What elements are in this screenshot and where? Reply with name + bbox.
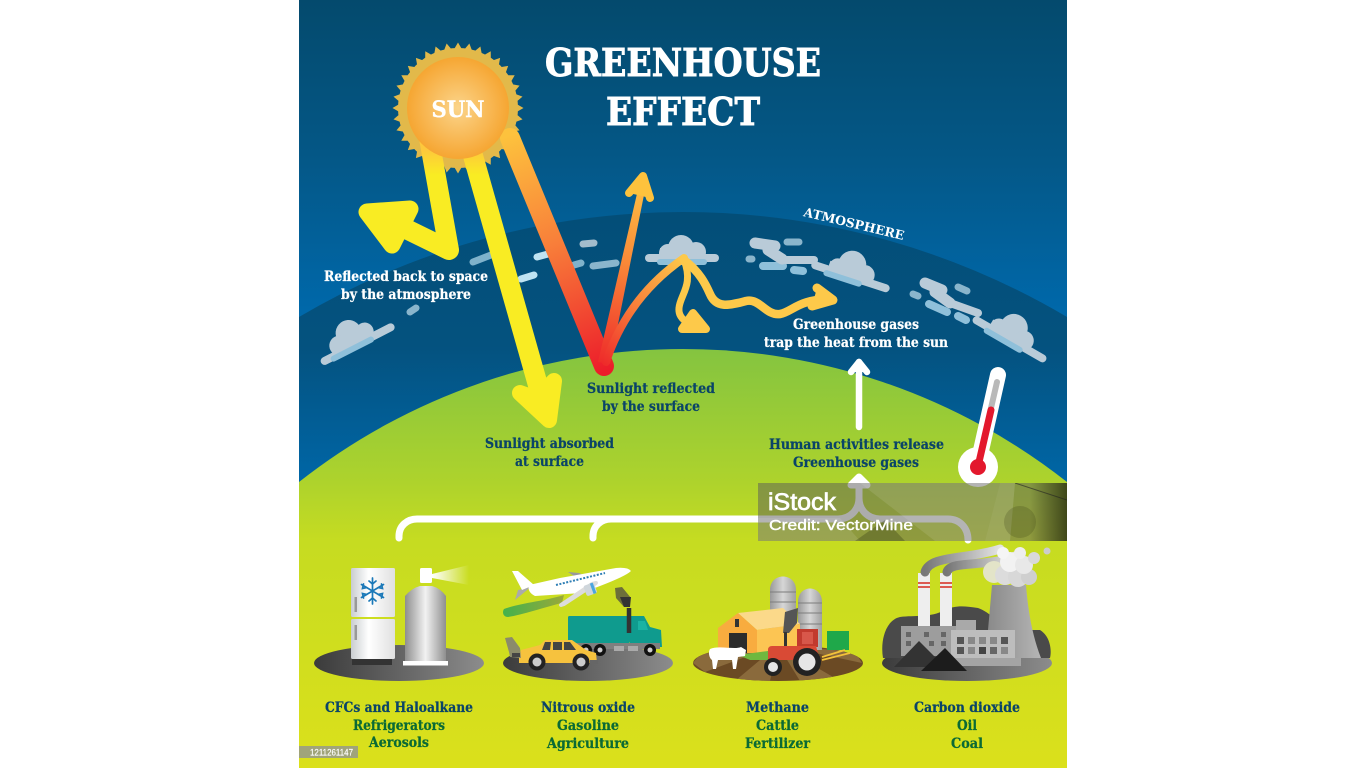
source: refrigerators and aerosols xyxy=(314,565,484,681)
spray can xyxy=(403,565,469,666)
text: sunlight reflected xyxy=(587,381,716,415)
labels: CFCs: Refrigerators xyxy=(353,718,445,734)
car xyxy=(505,637,598,670)
cloud: left xyxy=(312,303,392,364)
source: transport xyxy=(503,568,673,681)
labels: nitrous oxide: Agriculture xyxy=(546,736,629,752)
arrow: reflected by the atmosphere xyxy=(367,138,449,250)
text: sunlight absorbed xyxy=(485,436,615,470)
watermark banner xyxy=(758,483,1067,541)
text: reflected back to space: Reflected back to space xyxy=(324,269,488,285)
labels: nitrous oxide: Gasoline xyxy=(557,718,619,734)
text: reflected back to space xyxy=(324,269,488,303)
cloud: far right xyxy=(975,298,1055,362)
broken cloud: lower xyxy=(913,283,978,320)
coal piles xyxy=(894,641,967,671)
atmosphere dashes xyxy=(410,243,616,312)
labels: methane: Fertilizer xyxy=(745,736,811,752)
arrow: reflected to space xyxy=(598,176,650,364)
sun rays and halo xyxy=(392,42,524,174)
fridge xyxy=(351,568,395,665)
text: sunlight absorbed: at surface xyxy=(515,454,584,470)
labels: carbon dioxide xyxy=(914,700,1020,752)
text: human activities: Greenhouse gases xyxy=(793,455,919,471)
labels: nitrous oxide xyxy=(541,700,635,752)
broken cloud: upper xyxy=(749,242,814,271)
labels: methane xyxy=(745,700,811,752)
cloud: right of centre xyxy=(814,241,894,292)
dark background bushes xyxy=(882,606,1051,658)
sun label: SUN xyxy=(432,97,484,123)
text: greenhouse gases trap the heat xyxy=(764,317,948,351)
thermometer xyxy=(958,375,998,487)
title: EFFECT xyxy=(606,89,760,134)
labels: nitrous oxide: Nitrous oxide xyxy=(541,700,635,716)
arrow: incoming sunlight reflected by the surface xyxy=(510,138,604,366)
arrow: trapped heat xyxy=(684,260,833,314)
title: GREENHOUSE xyxy=(545,40,821,85)
cloud: centre xyxy=(649,235,715,262)
arrow: absorbed at surface xyxy=(468,138,554,420)
text: human activities: Human activities release xyxy=(769,437,944,453)
plane xyxy=(503,568,631,617)
cooling tower xyxy=(988,585,1041,658)
cow xyxy=(709,647,746,669)
text: human activities xyxy=(769,437,944,471)
silos xyxy=(770,576,822,650)
labels: carbon dioxide: Coal xyxy=(951,736,983,752)
image id tag: 1211261147 xyxy=(310,748,353,758)
background panel xyxy=(299,0,1067,768)
watermark brand: iStock xyxy=(768,489,837,516)
arrow: heat bounced back down xyxy=(679,260,706,329)
source: power plant xyxy=(882,547,1052,681)
text: greenhouse gases trap the heat: trap the heat from the sun xyxy=(764,335,948,351)
text: reflected back to space: by the atmosphere xyxy=(341,287,471,303)
text: sunlight reflected: by the surface xyxy=(602,399,700,415)
chimneys xyxy=(918,573,952,628)
labels: methane: Cattle xyxy=(756,718,799,734)
labels: carbon dioxide: Oil xyxy=(957,718,977,734)
text: sunlight reflected: Sunlight reflected xyxy=(587,381,716,397)
sun disc xyxy=(407,57,509,159)
labels: CFCs xyxy=(325,700,473,751)
infographic: greenhouse effect xyxy=(299,0,1067,768)
source: farm xyxy=(693,576,863,681)
arrow: reflected towards the gases xyxy=(606,258,684,362)
watermark credit: Credit: VectorMine xyxy=(769,517,913,534)
tractor xyxy=(764,608,850,676)
ground xyxy=(299,349,1067,768)
image id tag xyxy=(299,746,358,758)
smoke xyxy=(925,547,1050,587)
factory buildings xyxy=(901,620,1021,666)
atmosphere band xyxy=(299,212,1067,768)
labels: CFCs: Aerosols xyxy=(368,735,429,751)
text: greenhouse gases trap the heat: Greenhouse gases xyxy=(793,317,919,333)
barn xyxy=(718,608,800,660)
title xyxy=(545,40,821,134)
labels: carbon dioxide: Carbon dioxide xyxy=(914,700,1020,716)
arrow: up to the atmosphere xyxy=(851,362,867,427)
truck xyxy=(568,587,662,656)
atmosphere label: ATMOSPHERE xyxy=(801,204,906,243)
bracket connecting sources xyxy=(399,477,968,540)
text: sunlight absorbed: Sunlight absorbed xyxy=(485,436,615,452)
labels: methane: Methane xyxy=(746,700,809,716)
labels: CFCs: CFCs and Haloalkane xyxy=(325,700,473,716)
